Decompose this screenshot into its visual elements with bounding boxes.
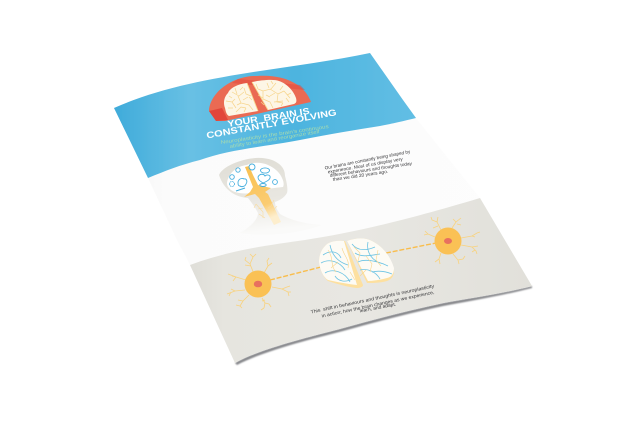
right hemisphere [347, 238, 394, 283]
title [206, 106, 337, 140]
thought icons [230, 164, 277, 191]
left hemisphere [319, 241, 363, 288]
closing paragraph: learn, and adapt. [359, 302, 397, 313]
left lobe [224, 83, 258, 116]
red semicircle [209, 76, 311, 121]
blue neural pathways [321, 242, 392, 282]
intro paragraph: than we did 20 years ago. [332, 169, 389, 182]
subtitle [220, 124, 330, 150]
gap highlight [247, 82, 268, 111]
closing paragraph: in action; how the brain changes as we experience, [321, 290, 435, 318]
intro paragraph [324, 149, 413, 182]
intro paragraph: experience. Most of us display very [327, 156, 404, 174]
booklet page [114, 53, 532, 363]
icon: right neuron [424, 217, 480, 264]
panel: blue header [114, 53, 416, 178]
subtitle: Neuroplasticity is the brain's continuous [220, 124, 330, 146]
dendrites [227, 254, 291, 310]
icon: header brain [209, 76, 311, 121]
panel: white middle section [114, 53, 532, 363]
icon: left neuron [227, 254, 291, 310]
orange spinal stem [244, 166, 281, 225]
icon: head with brain [219, 158, 322, 235]
title: CONSTANTLY EVOLVING [206, 107, 337, 140]
nerve branches [254, 200, 277, 218]
icon: lower brain [319, 238, 394, 288]
booklet shadow [235, 286, 532, 365]
yellow neural pathways [328, 247, 381, 280]
right lobe [252, 80, 296, 110]
white brain area [227, 163, 284, 194]
nucleus [254, 281, 262, 287]
subtitle: ability to learn and reorganize itself [229, 129, 321, 150]
closing paragraph: This shift in behaviours and thoughts is neuroplasticity [310, 283, 435, 314]
intro paragraph: Our brains are constantly being shaped by [324, 149, 411, 170]
cell body [244, 270, 272, 298]
intro paragraph: different behaviours and thoughts today [329, 161, 413, 178]
head silhouette [219, 158, 322, 235]
dashed connector lines [270, 243, 436, 280]
panel: grey lower section [190, 198, 532, 363]
brain folds [226, 81, 291, 112]
title: YOUR BRAIN IS [227, 106, 310, 129]
